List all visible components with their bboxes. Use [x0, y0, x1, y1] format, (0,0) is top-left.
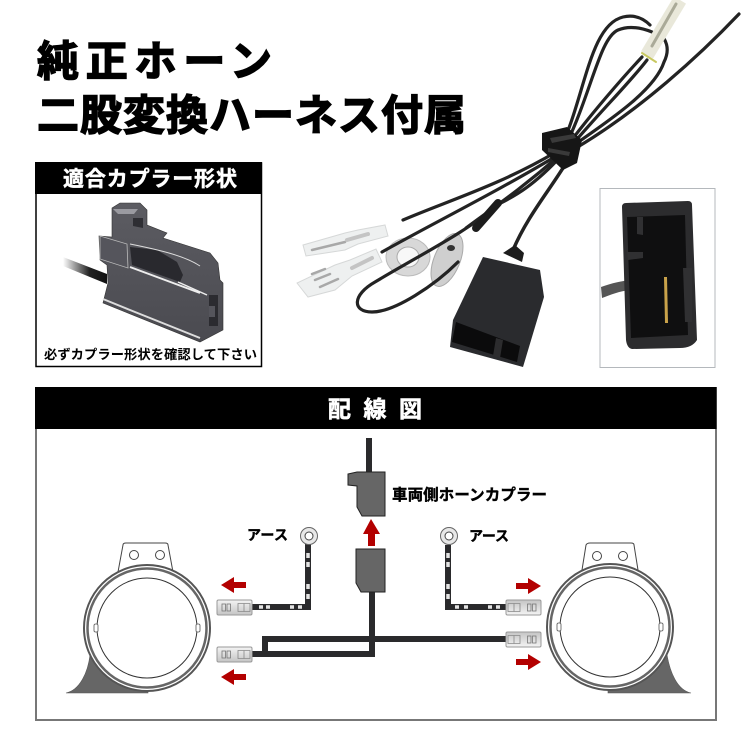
- title: 純正ホーン: [37, 38, 272, 85]
- photo: black coupler: [450, 245, 544, 367]
- icon: coupler illustration: [63, 203, 223, 342]
- ring terminals: [300, 528, 458, 544]
- caption: 必ずカプラー形状を確認して下さい: [44, 346, 257, 362]
- terminal: upper clear sleeve: [647, 0, 680, 55]
- title: 二股変換ハーネス付属: [37, 92, 466, 139]
- panel: wiring diagram: [35, 387, 716, 720]
- terminals: [217, 600, 541, 662]
- dashed earth wires: [252, 544, 506, 607]
- label: earth right: アース: [469, 528, 509, 544]
- panel heading: [35, 387, 716, 429]
- vehicle-side coupler: [348, 472, 385, 516]
- panel: compatible coupler: 適合カプラー形状: [63, 168, 237, 191]
- harness coupler: [356, 549, 385, 592]
- red arrows: [221, 519, 541, 685]
- photo: wiring harness: [297, 0, 739, 312]
- ring terminals: [386, 238, 430, 276]
- wires: lower bundle: [357, 152, 568, 312]
- label: vehicle coupler: 車両側ホーンカプラー: [392, 486, 547, 504]
- terminals: clear sleeves: [297, 225, 388, 297]
- panel: wiring diagram: 配線図: [328, 396, 422, 422]
- horn: right: [547, 543, 691, 693]
- wires: upper loops: [562, 14, 739, 148]
- panel heading: [35, 162, 262, 194]
- photo: coupler end inset: [600, 188, 715, 368]
- horn: left: [66, 543, 210, 693]
- label: earth left: アース: [247, 527, 288, 543]
- panel: compatible coupler: [35, 162, 262, 366]
- wires: [252, 438, 506, 654]
- knot: [542, 127, 582, 170]
- title: [37, 38, 466, 139]
